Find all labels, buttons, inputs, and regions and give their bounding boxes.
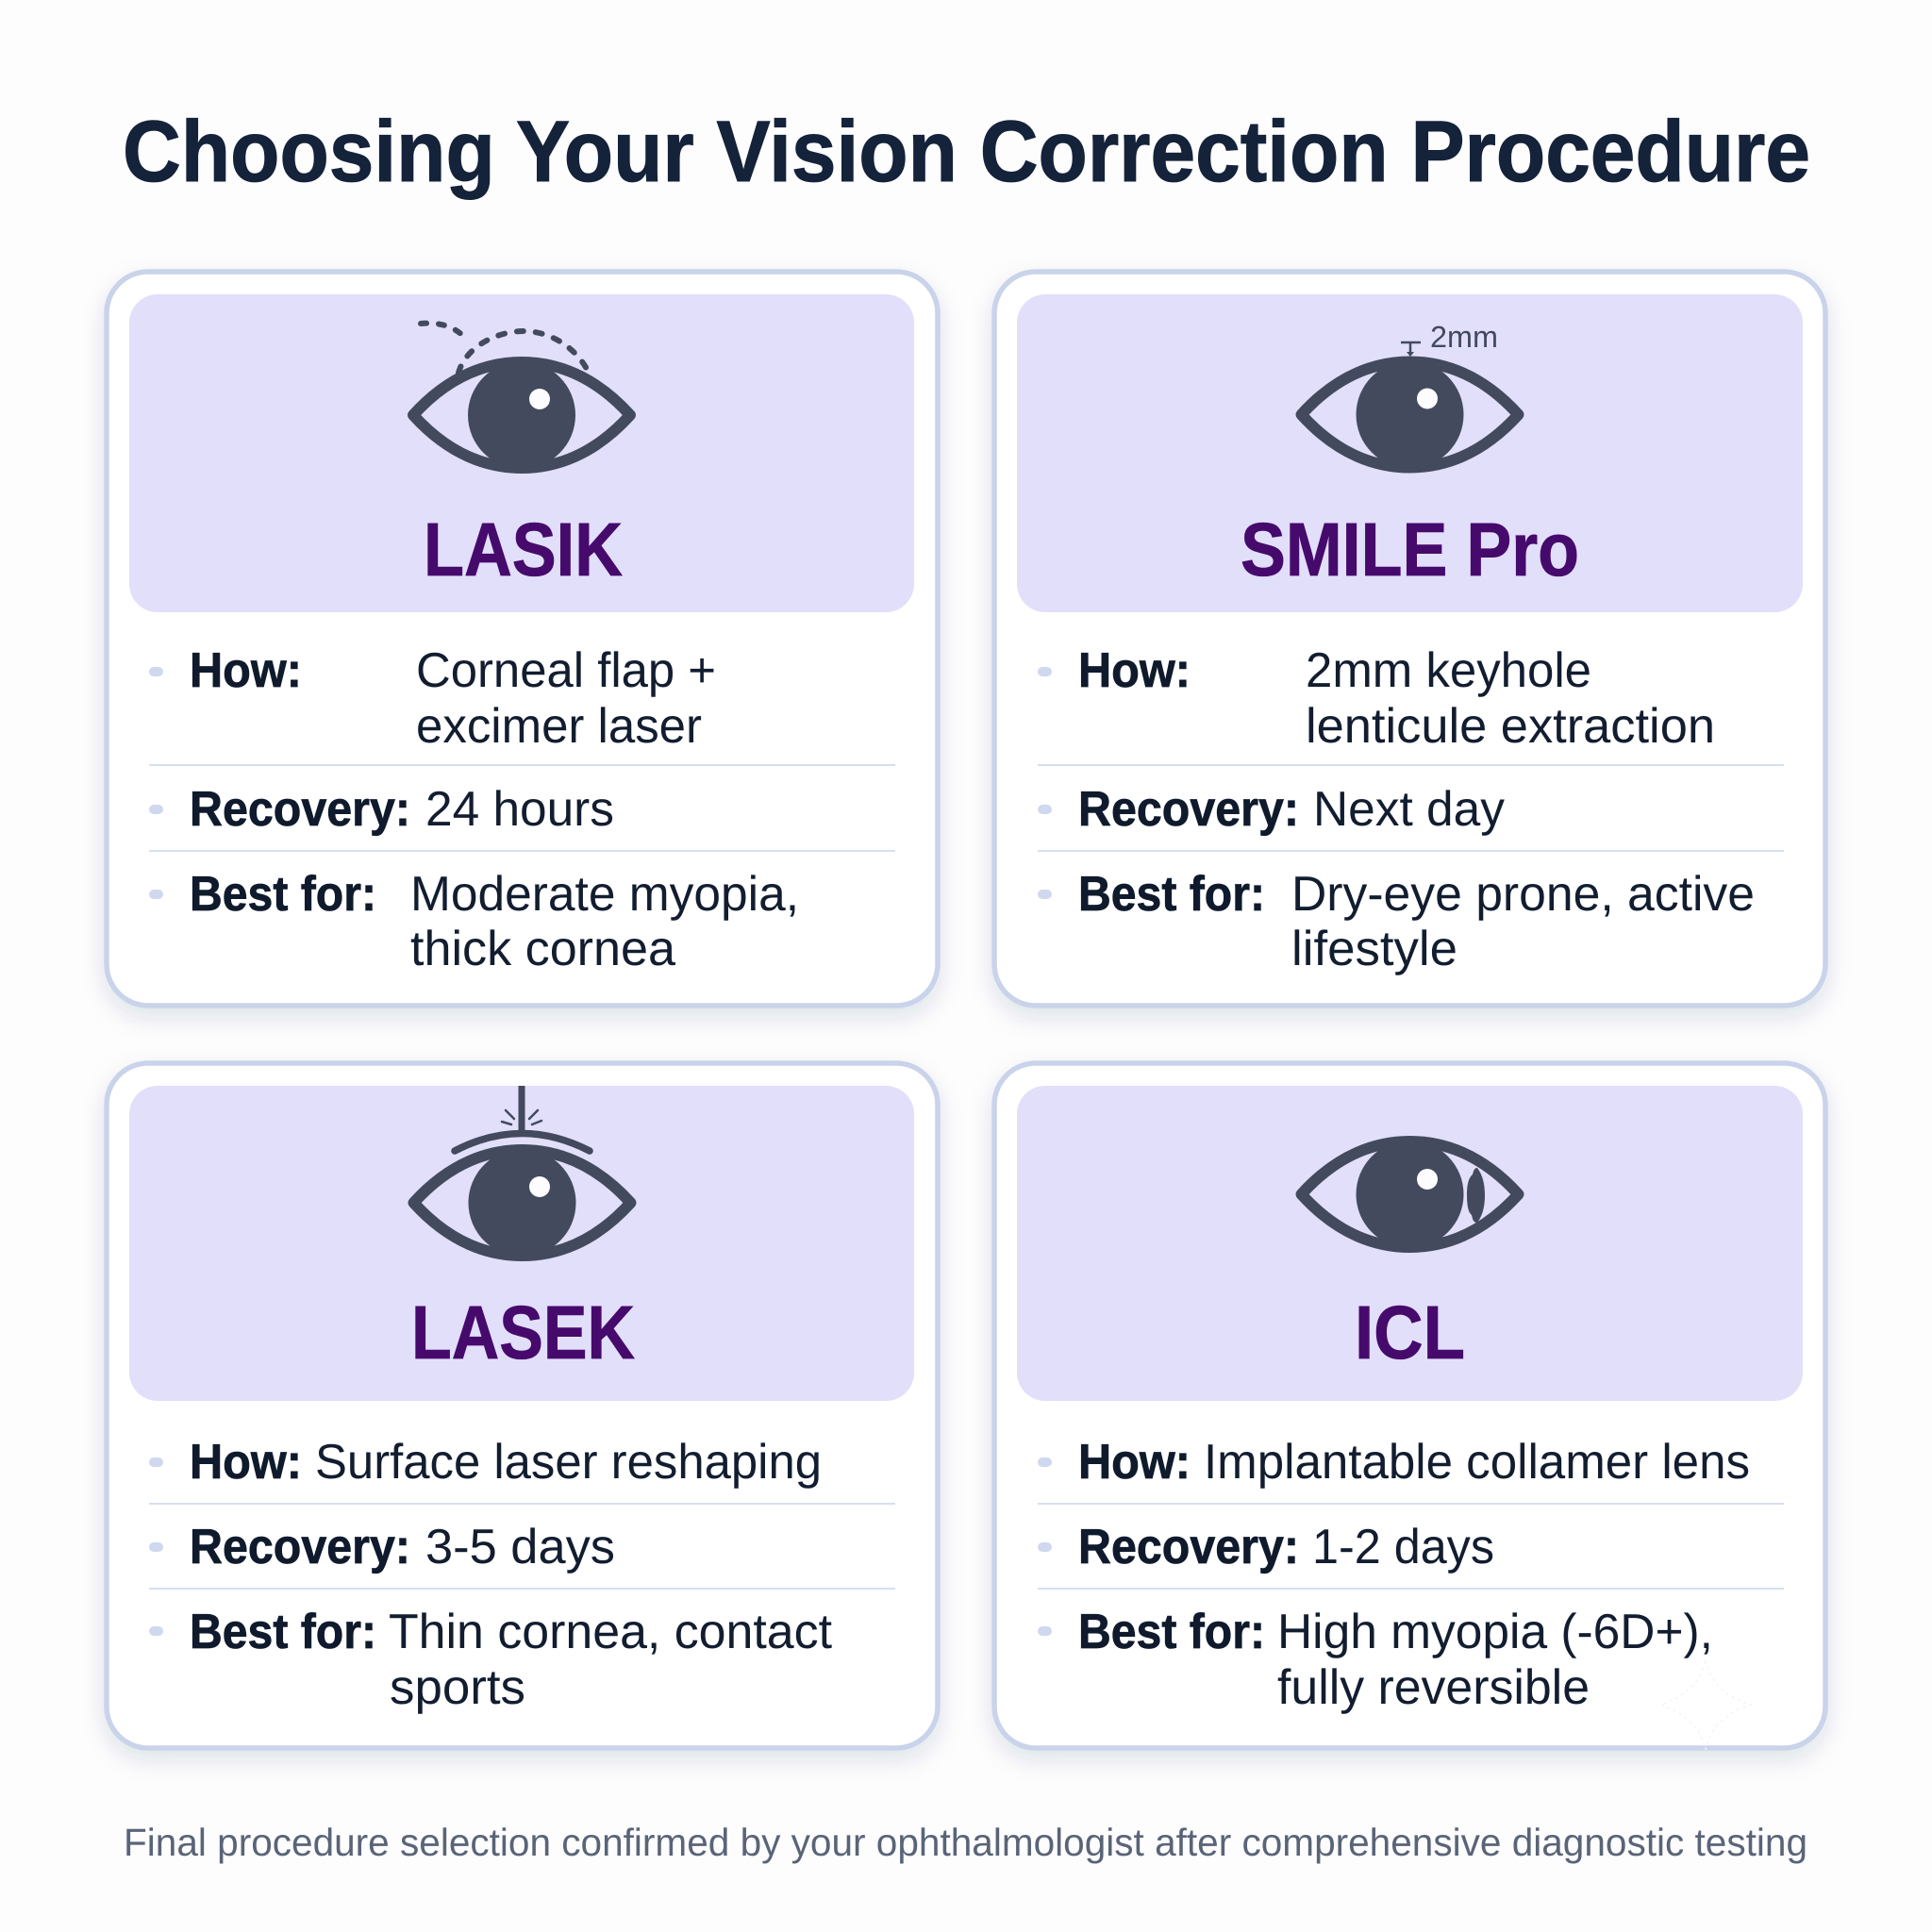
row: best for: High myopia (-6D+),: [1277, 1605, 1713, 1659]
row: recovery: [1038, 782, 1505, 837]
row: best for: Best for:: [1078, 1605, 1265, 1659]
row: best for: lifestyle: [1291, 922, 1457, 976]
card header: [129, 1086, 914, 1401]
row: best for: Best for:: [1078, 867, 1265, 922]
card background: [994, 272, 1825, 1006]
row: best for: Best for:: [190, 1605, 376, 1659]
icon: eye with corneal flap: [413, 324, 630, 469]
heading: SMILE Pro: SMILE Pro: [1241, 508, 1579, 591]
row: recovery: Recovery:: [190, 782, 410, 837]
icon: eye with 2mm keyhole: 2mm: [1430, 320, 1498, 354]
icon: eye with 2mm keyhole: [1302, 320, 1519, 468]
row: best for: [1038, 1605, 1713, 1715]
row: how: Implantable collamer lens: [1204, 1435, 1750, 1490]
row: best for: Moderate myopia,: [410, 867, 799, 922]
row: how: How:: [1078, 1435, 1191, 1490]
panel: LASEK: [107, 1063, 938, 1748]
row: how: Surface laser reshaping: [315, 1435, 822, 1490]
row: recovery: Recovery:: [190, 1520, 410, 1574]
card background: [994, 1063, 1825, 1748]
title: Choosing Your Vision Correction Procedure: [123, 104, 1810, 200]
row: how: 2mm keyhole: [1306, 643, 1591, 698]
footer note: Final procedure selection confirmed by your ophthalmologist after comprehensive diagnostic testing: [124, 1821, 1807, 1864]
heading: LASIK: LASIK: [424, 508, 623, 591]
row: best for: sports: [390, 1660, 525, 1715]
panel: LASIK: [107, 272, 938, 1006]
row: how: How:: [1078, 643, 1191, 698]
row: how: [1038, 643, 1715, 754]
row: recovery: Recovery:: [1078, 782, 1299, 837]
row: how: lenticule extraction: [1306, 699, 1715, 754]
row: how: Corneal flap +: [416, 643, 716, 698]
row: best for: Dry-eye prone, active: [1291, 867, 1755, 922]
row: best for: [149, 1605, 833, 1715]
row: recovery: [149, 782, 614, 837]
row: best for: Thin cornea, contact: [389, 1605, 833, 1659]
row: recovery: [1038, 1520, 1494, 1574]
row: best for: fully reversible: [1277, 1660, 1590, 1715]
row: recovery: Next day: [1313, 782, 1505, 837]
icon: eye with implanted lens: [1302, 1141, 1519, 1248]
row: how: excimer laser: [416, 699, 702, 754]
row: how: [149, 643, 716, 754]
card header: [129, 294, 914, 612]
row: recovery: 3-5 days: [425, 1520, 615, 1574]
row: best for: [149, 867, 799, 976]
card background: [107, 1063, 938, 1748]
card header: [1017, 294, 1803, 612]
row: recovery: 24 hours: [425, 782, 614, 837]
card header: [1017, 1086, 1803, 1401]
row: how: How:: [190, 643, 302, 698]
panel: SMILE Pro: [994, 272, 1825, 1006]
row: best for: Best for:: [190, 867, 376, 922]
icon: eye with surface laser: [413, 1086, 630, 1257]
row: recovery: 1-2 days: [1312, 1520, 1494, 1574]
heading: LASEK: LASEK: [411, 1291, 635, 1374]
heading: ICL: ICL: [1355, 1291, 1465, 1374]
row: recovery: Recovery:: [1078, 1520, 1299, 1574]
card background: [107, 272, 938, 1006]
row: best for: thick cornea: [410, 922, 675, 976]
panel: ICL: [994, 1063, 1825, 1748]
row: how: How:: [190, 1435, 302, 1490]
row: recovery: [149, 1520, 615, 1574]
row: best for: [1038, 867, 1755, 976]
